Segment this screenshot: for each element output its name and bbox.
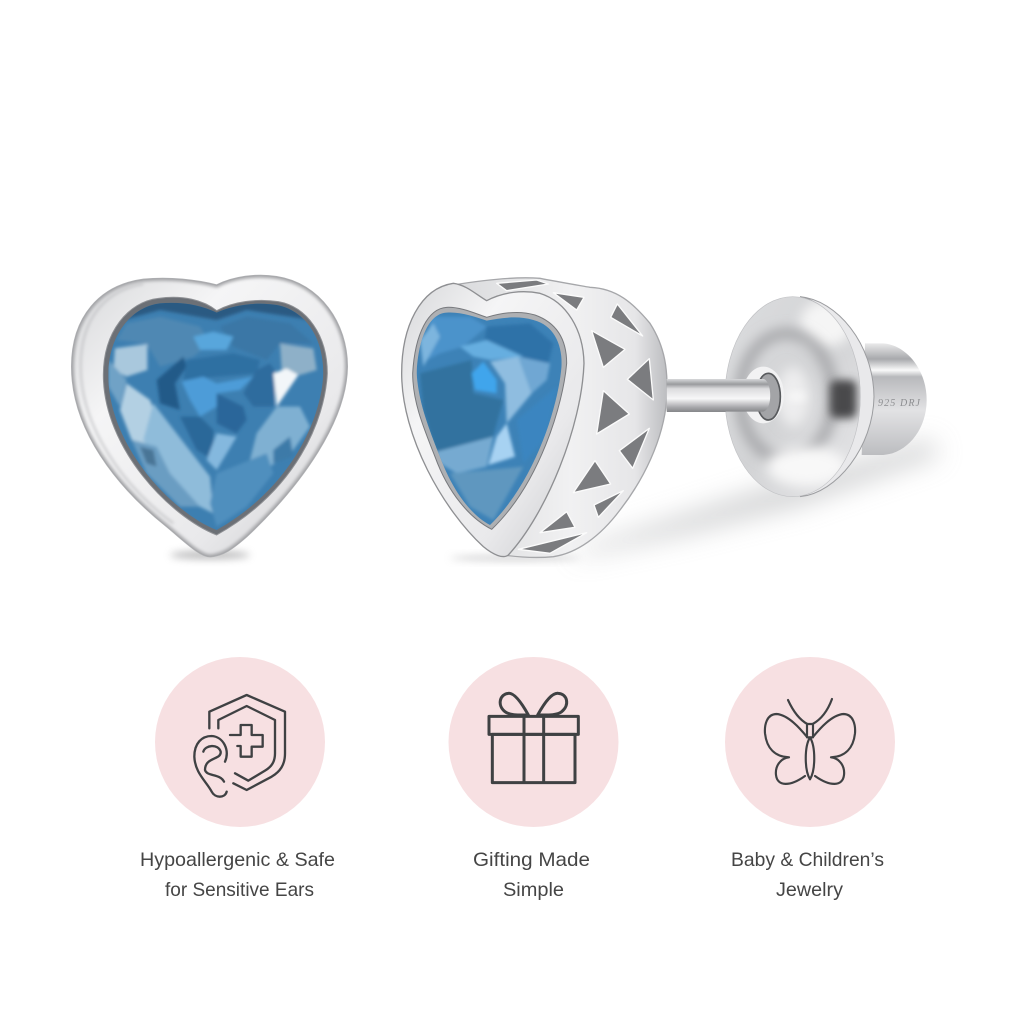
right earring: side view of heart stud bbox=[402, 278, 667, 557]
circle 2 bbox=[448, 657, 618, 827]
feature: hypoallergenic: for Sensitive Ears bbox=[165, 879, 314, 901]
feature: baby and children: Jewelry bbox=[776, 879, 843, 901]
clutch rim bbox=[800, 297, 874, 497]
bezel inner edge bbox=[103, 297, 327, 535]
left earring bezel bbox=[72, 275, 347, 557]
clutch barrel bbox=[862, 343, 927, 455]
clutch hole bbox=[743, 367, 784, 423]
label: Hypoallergenic & Safe bbox=[140, 849, 335, 871]
butterfly clutch back bbox=[667, 297, 927, 497]
icon: butterfly bbox=[765, 699, 855, 784]
left gem: blue topaz heart bbox=[103, 297, 330, 537]
label: Baby & Children’s bbox=[731, 849, 884, 871]
bezel inner edge bbox=[413, 307, 567, 529]
post end bbox=[667, 379, 770, 412]
circle 3 bbox=[725, 657, 895, 827]
feature: gifting: Simple bbox=[503, 879, 564, 901]
gallery body bbox=[453, 278, 667, 557]
feature: gifting bbox=[448, 657, 618, 901]
post bbox=[667, 379, 767, 412]
circle 1 bbox=[155, 657, 325, 827]
feature: baby and children bbox=[725, 657, 895, 901]
clutch disk bbox=[725, 297, 860, 497]
front bezel bbox=[402, 283, 584, 557]
label: Gifting Made bbox=[473, 849, 590, 871]
left earring: front view of heart stud bbox=[72, 275, 347, 557]
earring shadow bbox=[170, 440, 940, 561]
icon: gift box bbox=[489, 693, 578, 783]
right gem: blue topaz heart bbox=[413, 307, 567, 530]
feature: hypoallergenic bbox=[140, 657, 335, 901]
stamp text: 925 DRJ bbox=[878, 398, 921, 409]
gallery windows bbox=[497, 280, 653, 553]
bezel shading bbox=[72, 275, 347, 557]
icon: ear and shield bbox=[194, 695, 285, 797]
